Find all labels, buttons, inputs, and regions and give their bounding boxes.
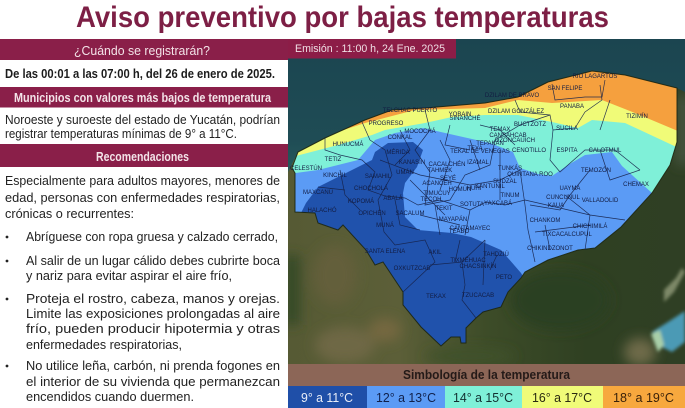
legend title xyxy=(288,364,685,386)
list: recommendations: No utilice leña, carbón, ni prenda fogones en xyxy=(26,359,280,373)
legend: 14 to 15 xyxy=(445,386,522,408)
municipality labels: PROGRESO xyxy=(369,121,404,127)
municipality labels: CONKAL xyxy=(388,135,413,141)
municipality labels: SUCILA xyxy=(556,126,578,132)
municipality labels: YAXCABÁ xyxy=(484,200,512,207)
municipal boundaries xyxy=(292,71,677,346)
municipality labels: ABALÁ xyxy=(383,195,403,202)
legend: 14 to 15: 14° a 15°C xyxy=(453,390,513,405)
municipality labels: TELCHAC PUERTO xyxy=(383,108,438,114)
municipality labels: TEPAKÁN xyxy=(476,140,504,147)
list: recommendations: enfermedades respiratorias, xyxy=(26,338,182,352)
text: date range: De las 00:01 a las 07:00 h, del 26 de enero de 2025. xyxy=(5,67,275,81)
text: target population: crónicas o recurrentes: xyxy=(5,207,134,221)
municipality labels: SANTA ELENA xyxy=(365,249,405,255)
heading: municipalities xyxy=(0,87,288,108)
legend: 18 to 19 xyxy=(603,386,685,408)
panel: left information column xyxy=(0,39,288,404)
municipality labels: PETO xyxy=(496,275,512,281)
municipality labels: SAMAHIL xyxy=(365,174,392,180)
municipality labels: MÉRIDA xyxy=(386,149,410,156)
municipality labels: SACALUM xyxy=(395,211,425,217)
text: affected areas xyxy=(5,113,280,141)
municipality labels: SOTUTA xyxy=(460,202,484,208)
municipality labels: CHANKOM xyxy=(530,218,560,224)
list: recommendations: Proteja el rostro, cabeza, manos y orejas. xyxy=(26,292,280,306)
temperature bands xyxy=(292,71,677,346)
municipality labels: TEABO xyxy=(449,229,469,235)
municipality labels: OPICHÉN xyxy=(358,210,386,217)
legend: temperature symbology xyxy=(288,364,685,408)
municipality labels: TEKIT xyxy=(435,206,453,212)
municipality labels: YOBAIN xyxy=(449,112,471,118)
municipality labels: CANSAHCAB xyxy=(489,133,527,139)
municipality labels: TEKAX xyxy=(426,294,446,300)
municipality labels: SINANCHÉ xyxy=(449,115,481,122)
municipality labels: CHOCHOLÁ xyxy=(354,185,388,192)
legend: 16 to 17: 16° a 17°C xyxy=(532,390,592,405)
municipality labels: TUNKÁS xyxy=(498,165,522,172)
list: recommendations: Limite las exposiciones prolongadas al aire xyxy=(26,307,280,321)
municipality labels: CHIKINDZONOT xyxy=(527,246,573,252)
legend: 9 to 11 xyxy=(288,386,367,408)
municipality labels: DZILAM DE BRAVO xyxy=(485,93,539,99)
legend: 18 to 19: 18° a 19°C xyxy=(613,390,674,405)
municipality labels: SUDZAL xyxy=(493,179,517,185)
municipality labels: IZAMAL xyxy=(467,160,489,166)
municipality labels: CALOTMUL xyxy=(589,148,622,154)
municipality labels: TIZIMÍN xyxy=(626,113,648,120)
list: recommendations: frío, pueden producir hipotermia y otras xyxy=(26,322,280,336)
municipality labels: MAXCANÚ xyxy=(303,189,333,196)
heading: recommendations xyxy=(0,144,288,167)
municipality labels: HUNUCMÁ xyxy=(333,141,363,148)
municipality labels: CANTAMAYEC xyxy=(450,226,491,232)
municipality labels: KINCHIL xyxy=(323,173,347,179)
municipality labels: OXKUTZCAB xyxy=(394,266,430,272)
municipality labels: ACANCEH xyxy=(422,181,452,187)
municipality labels xyxy=(290,74,649,300)
heading: when xyxy=(0,39,288,60)
municipality labels: UAYMA xyxy=(560,186,580,192)
municipality labels: MOCOCHÁ xyxy=(404,128,436,135)
municipality labels: CHACSINKÍN xyxy=(459,263,497,270)
heading: municipalities: Municipios con valores más bajos de temperatura xyxy=(14,91,272,105)
municipality labels: ESPITA xyxy=(557,148,577,154)
municipality labels: BUCTZOTZ xyxy=(514,122,546,128)
text: affected areas: Noroeste y suroeste del estado de Yucatán, podrían xyxy=(5,113,280,127)
satellite background xyxy=(284,39,685,366)
municipality labels: CELESTÚN xyxy=(290,165,322,172)
municipality labels: SEYÉ xyxy=(440,175,456,182)
municipality labels: MAYAPÁN xyxy=(439,216,467,223)
municipality labels: AKIL xyxy=(428,250,442,256)
municipality labels: KANTUNIL xyxy=(475,184,505,190)
municipality labels: HOMÚN xyxy=(449,186,471,193)
municipality labels: CHEMAX xyxy=(623,182,649,188)
municipality labels: TECOH xyxy=(420,197,442,203)
badge: issue time xyxy=(288,39,456,58)
municipality labels: KANASÍN xyxy=(399,159,425,166)
municipality labels: HUHÍ xyxy=(467,185,482,192)
municipality labels: KOPOMÁ xyxy=(348,198,374,205)
list: recommendations xyxy=(6,230,280,404)
municipality labels: TIMUCUY xyxy=(423,191,451,197)
municipality labels: MUNÁ xyxy=(376,222,394,229)
legend: 12 to 13: 12° a 13°C xyxy=(376,390,436,405)
list: recommendations: y nariz para evitar aspirar el aire frío, xyxy=(26,269,232,283)
municipality labels: TINUM xyxy=(500,193,520,199)
legend: 9 to 11: 9° a 11°C xyxy=(301,390,353,405)
municipality labels: KAUA xyxy=(548,203,564,209)
legend: 12 to 13 xyxy=(367,386,445,408)
municipality labels: CHICHIMILÁ xyxy=(573,223,607,230)
municipality labels: CUNCUNUL xyxy=(546,195,580,201)
municipality labels: RIO LAGARTOS xyxy=(573,74,617,80)
legend title: Simbología de la temperatura xyxy=(403,368,571,382)
list: recommendations: Abríguese con ropa gruesa y calzado cerrado, xyxy=(26,230,278,244)
municipality labels: VALLADOLID xyxy=(582,198,619,204)
legend: 16 to 17 xyxy=(522,386,603,408)
municipality labels: UMÁN xyxy=(396,169,414,176)
heading: recommendations: Recomendaciones xyxy=(96,150,189,164)
municipality labels: SAN FELIPE xyxy=(548,86,582,92)
heading: when: ¿Cuándo se registrarán? xyxy=(74,43,210,58)
list: recommendations: Al salir de un lugar cálido debes cubrirte boca xyxy=(26,254,280,268)
municipality labels: DZONCAUICH xyxy=(495,138,535,144)
municipality labels: CACALCHÉN xyxy=(428,161,466,168)
map: Yucatán minimum temperature xyxy=(284,39,685,366)
municipality labels: TZUCACAB xyxy=(462,293,494,299)
text: target population: edad, personas con enfermedades respiratorias, xyxy=(5,191,280,205)
badge: issue time: Emisión : 11:00 h, 24 Ene. 2025 xyxy=(295,43,445,55)
municipality labels: TAHDZIÚ xyxy=(483,251,509,258)
municipality labels: TEKAL DE VENEGAS xyxy=(450,149,510,155)
municipality labels: TIXCACALCUPUL xyxy=(542,232,592,238)
title: Aviso preventivo por bajas temperaturas xyxy=(76,1,609,34)
municipality labels: PANABA xyxy=(560,104,584,110)
municipality labels: TIXMÉHUAC xyxy=(450,257,486,264)
municipality labels: TEMAX xyxy=(490,127,510,133)
municipality labels: DZILAM GONZÁLEZ xyxy=(488,108,544,115)
municipality labels: TAHMEK xyxy=(428,168,452,174)
list: recommendations: el interior de su vivienda que permanezcan xyxy=(26,375,280,389)
municipality labels: HALACHÓ xyxy=(307,207,337,214)
text: target population xyxy=(5,174,280,221)
municipality labels: TEYA xyxy=(467,146,483,152)
municipality labels: CENOTILLO xyxy=(512,148,546,154)
municipality labels: TEMOZÓN xyxy=(581,167,611,174)
text: target population: Especialmente para adultos mayores, menores de xyxy=(5,174,280,188)
list: recommendations: encendidos cuando duermen. xyxy=(26,390,194,404)
municipality labels: TETIZ xyxy=(325,157,342,163)
text: affected areas: registrar temperaturas mínimas de 9° a 11°C. xyxy=(5,127,237,141)
municipality labels: QUINTANA ROO xyxy=(507,172,553,178)
